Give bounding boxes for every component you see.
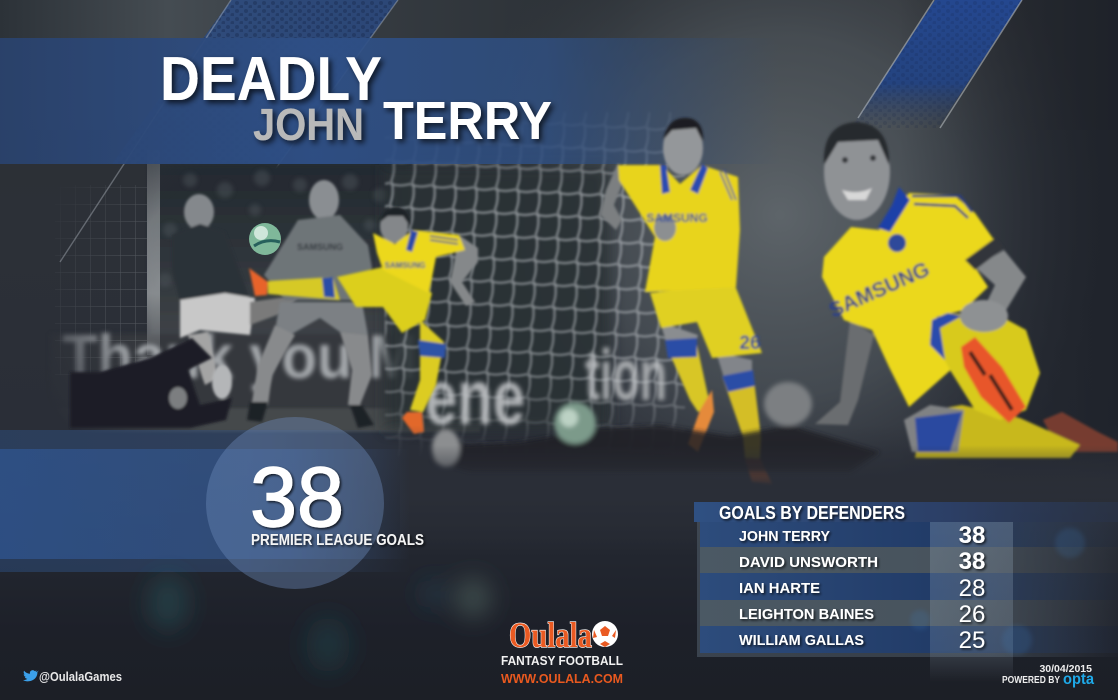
oulala logo: Oulala (509, 615, 592, 655)
banner text: ene: ene (425, 353, 525, 441)
diagonal stripe: top left (60, 0, 398, 280)
row 3 name: IAN HARTE (739, 580, 820, 597)
header band (694, 502, 1118, 522)
icon: twitter bird (23, 670, 39, 681)
row 5 (700, 626, 1118, 653)
row 3 value: 28 (959, 575, 985, 602)
row 1 name: JOHN TERRY (739, 528, 830, 545)
bokeh in table (910, 528, 1085, 655)
stat: 38: 38 (250, 450, 344, 544)
bokeh lights (148, 575, 491, 673)
banner text: tion: tion (585, 336, 667, 416)
table: goals by defenders (694, 502, 1118, 682)
captain armband (965, 238, 1004, 270)
arm bent (600, 163, 624, 230)
row 2 (700, 547, 1118, 573)
arm (450, 235, 478, 306)
row 1 value: 38 (959, 522, 985, 549)
red boot back (1043, 412, 1118, 452)
shorts (650, 283, 762, 358)
sock left (666, 345, 710, 412)
row 5 value: 25 (959, 627, 985, 654)
supporting arm (815, 320, 874, 425)
lower dark fade on photos (400, 425, 1118, 555)
photo: grey Chelsea player: SAMSUNG (297, 242, 343, 252)
row 4 value: 26 (959, 601, 985, 628)
shirt (618, 165, 740, 292)
net right (385, 112, 685, 457)
photo: grey Chelsea player (247, 180, 374, 428)
opta wordmark: opta (1063, 671, 1094, 688)
sponsor: SAMSUNG (826, 258, 933, 322)
logo ball (592, 621, 618, 647)
number column (930, 522, 1013, 682)
website: WWW.OULALA.COM (501, 671, 623, 686)
row 5 name: WILLIAM GALLAS (739, 632, 864, 649)
top blue band (0, 38, 780, 164)
player: Terry running (600, 118, 772, 484)
head (824, 124, 890, 220)
photo: centre net and banner (385, 112, 685, 457)
header text: GOALS BY DEFENDERS (719, 503, 905, 523)
head (663, 121, 703, 175)
stat label: PREMIER LEAGUE GOALS (251, 532, 424, 549)
row 1 (700, 522, 1118, 547)
title: deadly: DEADLY (160, 45, 382, 114)
ball (554, 402, 596, 444)
row 2 name: DAVID UNSWORTH (739, 554, 878, 571)
boot kicking (249, 268, 268, 296)
net left (55, 185, 147, 375)
kit sponsor: SAMSUNG (646, 211, 708, 225)
diagonal stripe: top right (851, 0, 1022, 128)
dark backdrop behind net (385, 165, 610, 430)
collar (406, 230, 418, 252)
crest (888, 234, 906, 252)
player: Terry sliding (815, 122, 1118, 458)
photo: goalkeeper (70, 338, 232, 428)
date: 30/04/2015 (1039, 663, 1092, 675)
banner text: thank you: Thank you M (62, 323, 417, 392)
hand (960, 300, 1008, 332)
title: john: JOHN (253, 99, 364, 150)
standing leg (410, 320, 444, 412)
shirt (822, 193, 999, 407)
shirt (373, 230, 465, 293)
collar (878, 187, 910, 232)
kicking leg sock (268, 277, 340, 300)
keeper head (764, 382, 812, 426)
legs (660, 322, 698, 358)
collar (660, 164, 708, 194)
lower blue band (0, 430, 410, 572)
boot (402, 412, 424, 434)
powered by opta (1002, 671, 1094, 688)
kit sponsor: SAMSUNG (385, 261, 425, 270)
row 3 (700, 573, 1118, 600)
table frame (697, 522, 1118, 657)
glove (432, 429, 460, 467)
shorts (337, 267, 432, 333)
powered by opta: POWERED BY (1002, 675, 1060, 686)
title: terry: TERRY (383, 91, 552, 151)
background (0, 0, 1066, 532)
fist (654, 215, 676, 241)
keeper and ball: bottom centre (432, 382, 880, 472)
forearm (975, 250, 1026, 312)
row 2 value: 38 (959, 548, 985, 575)
twitter handle: @OulalaGames (39, 670, 122, 684)
boot sole (961, 337, 1026, 423)
keeper (432, 425, 880, 472)
sock right (722, 372, 761, 458)
fantasy football: FANTASY FOOTBALL (501, 653, 623, 668)
lower leg (915, 405, 1080, 458)
photo: grey Leicester player (172, 194, 300, 385)
circle behind stat (206, 417, 384, 589)
raised leg (930, 313, 1040, 420)
crowd backdrop (112, 164, 478, 432)
head (380, 209, 408, 243)
goal post (147, 150, 160, 355)
photo: ball left (249, 223, 281, 255)
bottom fade over photo feet (400, 445, 1118, 515)
player: Terry kicking (249, 207, 478, 434)
number: 26 (739, 333, 761, 354)
boots (688, 390, 714, 452)
photo: left goal scene (40, 150, 480, 432)
row 4 name: LEIGHTON BAINES (739, 606, 874, 623)
row 4 (700, 600, 1118, 626)
